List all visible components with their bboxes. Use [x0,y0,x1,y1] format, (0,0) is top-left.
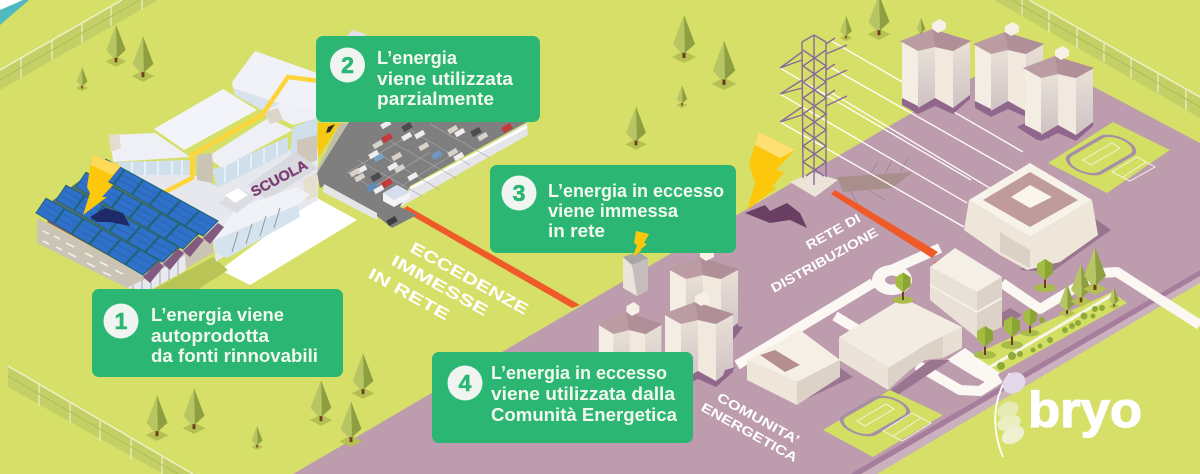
callout 3 text: L’energia in eccesso [548,181,724,201]
central community building [839,298,962,400]
sports field lower [823,390,943,457]
callout 2 [316,36,540,122]
lightning bolt on panels [83,155,121,215]
purple eaves [47,217,146,277]
callout 3 text: viene immessa [548,201,679,221]
bolt shadow on ground [745,203,807,228]
glazed corner [127,255,186,290]
SCUOLA sign text: SCUOLA [248,156,310,200]
beige stair towers [197,108,283,183]
park strip [893,247,1127,373]
tall community building [930,248,1022,338]
step number 4: 4 [459,370,472,396]
callout 1 [92,289,343,377]
trees left [76,25,374,450]
label: eccedenze immesse in rete [365,240,531,324]
school building [109,30,366,290]
school floor [130,150,318,262]
solar row 1 [36,198,164,283]
small bolt over callout 3 [633,231,649,257]
white forecourt [220,198,357,285]
solar wall [37,218,213,288]
label: rete di distribuzione: RETE DI [803,210,863,253]
courts [883,413,931,441]
panel base [36,162,218,275]
parking wall right [395,123,528,207]
lower apartment blocks [597,247,743,397]
logo wordmark: bryo [1028,382,1142,438]
step number 3 [502,176,536,210]
power lines [780,40,1023,227]
pitch [1083,143,1120,165]
roundabout [872,265,912,295]
trees upper middle [625,0,926,150]
solar row 3 [76,172,204,257]
callout 1 text [151,305,318,366]
yellow strip [318,123,340,155]
label: eccedenze immesse in rete: ECCEDENZE [407,240,531,319]
shadow under tower [837,158,913,205]
pitch [857,404,894,426]
callout 4 [432,352,693,443]
solar building [36,155,224,290]
electricity pylon [780,35,847,197]
step number 1: 1 [115,308,128,334]
road wedge [947,348,1000,383]
sports field upper [1048,122,1170,193]
label: rete di distribuzione [768,210,881,296]
round trees [893,259,1056,359]
pines [1059,247,1119,317]
yellow energy path [163,77,320,193]
fence top-left [0,0,158,90]
orange line: surplus to grid [402,206,580,308]
bolt shadow on panels [90,208,130,226]
callout 2 text: parzialmente [377,89,494,109]
big lightning bolt [747,132,795,210]
lower edge strip [850,270,1200,474]
corner road top-left [0,0,29,25]
step number 4 [448,366,482,400]
front wing [215,187,310,258]
fence bottom-left [8,366,193,474]
parking surface [317,122,527,228]
step number 1 [104,304,138,338]
callout 2 text [377,48,514,109]
road network [737,248,1200,391]
callout 4 text [491,363,678,425]
pylon lattice [780,35,847,185]
label: comunita energetica: COMUNITA’ [715,390,802,447]
upper apartment blocks [900,19,1094,141]
step number 3: 3 [513,180,525,206]
callout 4 text: Comunità Energetica [491,405,678,425]
callout 3 text: in rete [548,221,605,241]
rear wing [109,133,190,175]
step number 2 [330,48,365,82]
callout 2 text: viene utilizzata [377,69,514,89]
upper roof [232,30,366,124]
ground shadow [152,257,228,290]
shrubs [997,305,1105,370]
callout 4 text: L’energia in eccesso [491,363,667,383]
parking wall left [323,184,377,220]
solar row 2 [56,185,184,270]
parking lines [347,124,490,196]
solar row 4 [96,159,224,244]
left community building [747,330,853,405]
running track [835,393,915,439]
main roof [154,89,257,150]
right wing [265,103,317,168]
roof unit [218,188,257,213]
fence top-right [994,0,1200,118]
bryo logo [995,368,1142,457]
big central building [964,163,1111,272]
label: eccedenze immesse in rete: IMMESSE [388,253,491,320]
callout 1 text: L’energia viene [151,305,284,325]
label: comunita energetica: ENERGETICA [699,400,801,465]
running track [1061,132,1141,178]
step number 2: 2 [341,52,354,78]
window rows [43,231,123,276]
central glazed block [207,118,293,188]
callout 1 text: autoprodotta [151,326,270,346]
beige edge strip [317,123,350,176]
label: comunita energetica [699,390,802,465]
parking lot [317,120,528,228]
callout 4 text: viene utilizzata dalla [491,384,676,404]
callout 1 text: da fonti rinnovabili [151,346,318,366]
courts [1112,157,1155,181]
small block [623,252,648,296]
label: rete di distribuzione: DISTRIBUZIONE [768,224,881,296]
callout 3 [490,165,736,253]
guard house [383,185,410,207]
pylon base [790,172,838,197]
cars [349,120,513,226]
label: eccedenze immesse in rete: IN RETE [365,266,452,324]
sign band [248,152,318,200]
logo leaf mark [995,368,1030,457]
callout 3 text [548,181,724,241]
red arrow to community [831,190,957,267]
callout 2 text: L’energia [377,48,458,68]
purple district ground [293,49,1200,474]
